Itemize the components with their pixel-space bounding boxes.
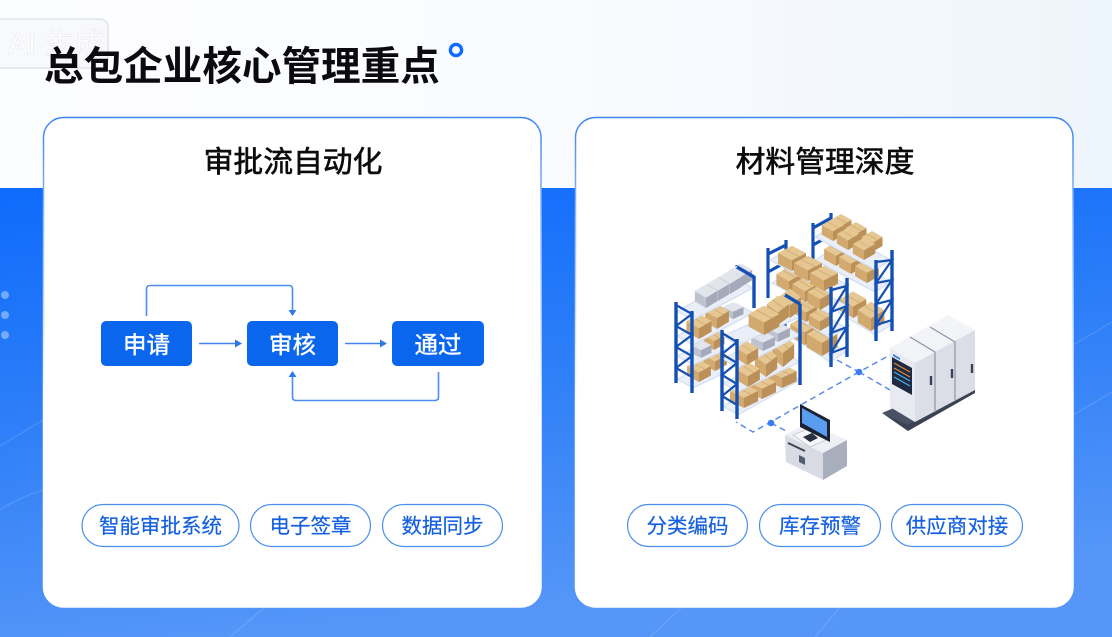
node: 通过 xyxy=(392,321,484,366)
arrow: 通过 back to 审核 xyxy=(288,371,438,400)
tag: 电子签章 xyxy=(250,504,370,546)
node: 申请: 申请 xyxy=(123,332,170,358)
arrow: 申请 to 审核 xyxy=(199,340,242,348)
arrow: 审核 to 通过 xyxy=(345,340,387,348)
panel heading: 审批流自动化 xyxy=(204,146,382,179)
server cabinet xyxy=(882,315,975,431)
tag: 分类编码 xyxy=(628,504,748,546)
watermark: AI 生成 xyxy=(0,19,108,68)
tag: 分类编码: 分类编码 xyxy=(646,515,728,538)
decorative side dots xyxy=(1,291,9,339)
node: 审核 xyxy=(247,321,338,366)
node: 审核: 审核 xyxy=(269,332,316,358)
network nodes xyxy=(768,369,862,426)
title: 总包企业核心管理重点 xyxy=(44,45,440,89)
node: 申请 xyxy=(101,321,192,366)
panel: 审批流自动化 xyxy=(44,118,541,607)
tag: 库存预警 xyxy=(760,504,880,546)
watermark: AI 生成: AI 生成 xyxy=(8,28,105,61)
shelf: front xyxy=(722,289,801,419)
shelf: back left xyxy=(676,263,754,393)
terminal desk xyxy=(785,404,847,480)
shelf: back right xyxy=(813,213,892,341)
shelf: middle xyxy=(768,240,847,367)
tag: 智能审批系统 xyxy=(82,504,239,546)
panel background xyxy=(576,118,1073,607)
dashed network lines xyxy=(736,355,890,432)
panel: 材料管理深度 xyxy=(576,118,1073,607)
tag: 电子签章: 电子签章 xyxy=(270,515,352,538)
tag: 数据同步: 数据同步 xyxy=(402,515,484,538)
warehouse illustration xyxy=(676,213,975,480)
tag: 库存预警: 库存预警 xyxy=(779,515,861,538)
node: 通过: 通过 xyxy=(414,332,462,358)
panel heading: 材料管理深度 xyxy=(736,146,914,179)
icon: title ring xyxy=(450,44,462,56)
flow diagram xyxy=(101,286,484,400)
arrow: 申请 over to 审核 xyxy=(146,286,296,316)
tag: 供应商对接: 供应商对接 xyxy=(906,515,1008,538)
panel background xyxy=(44,118,541,607)
tag: 数据同步 xyxy=(382,504,502,546)
tag: 智能审批系统: 智能审批系统 xyxy=(99,515,222,538)
tag: 供应商对接 xyxy=(892,504,1022,546)
